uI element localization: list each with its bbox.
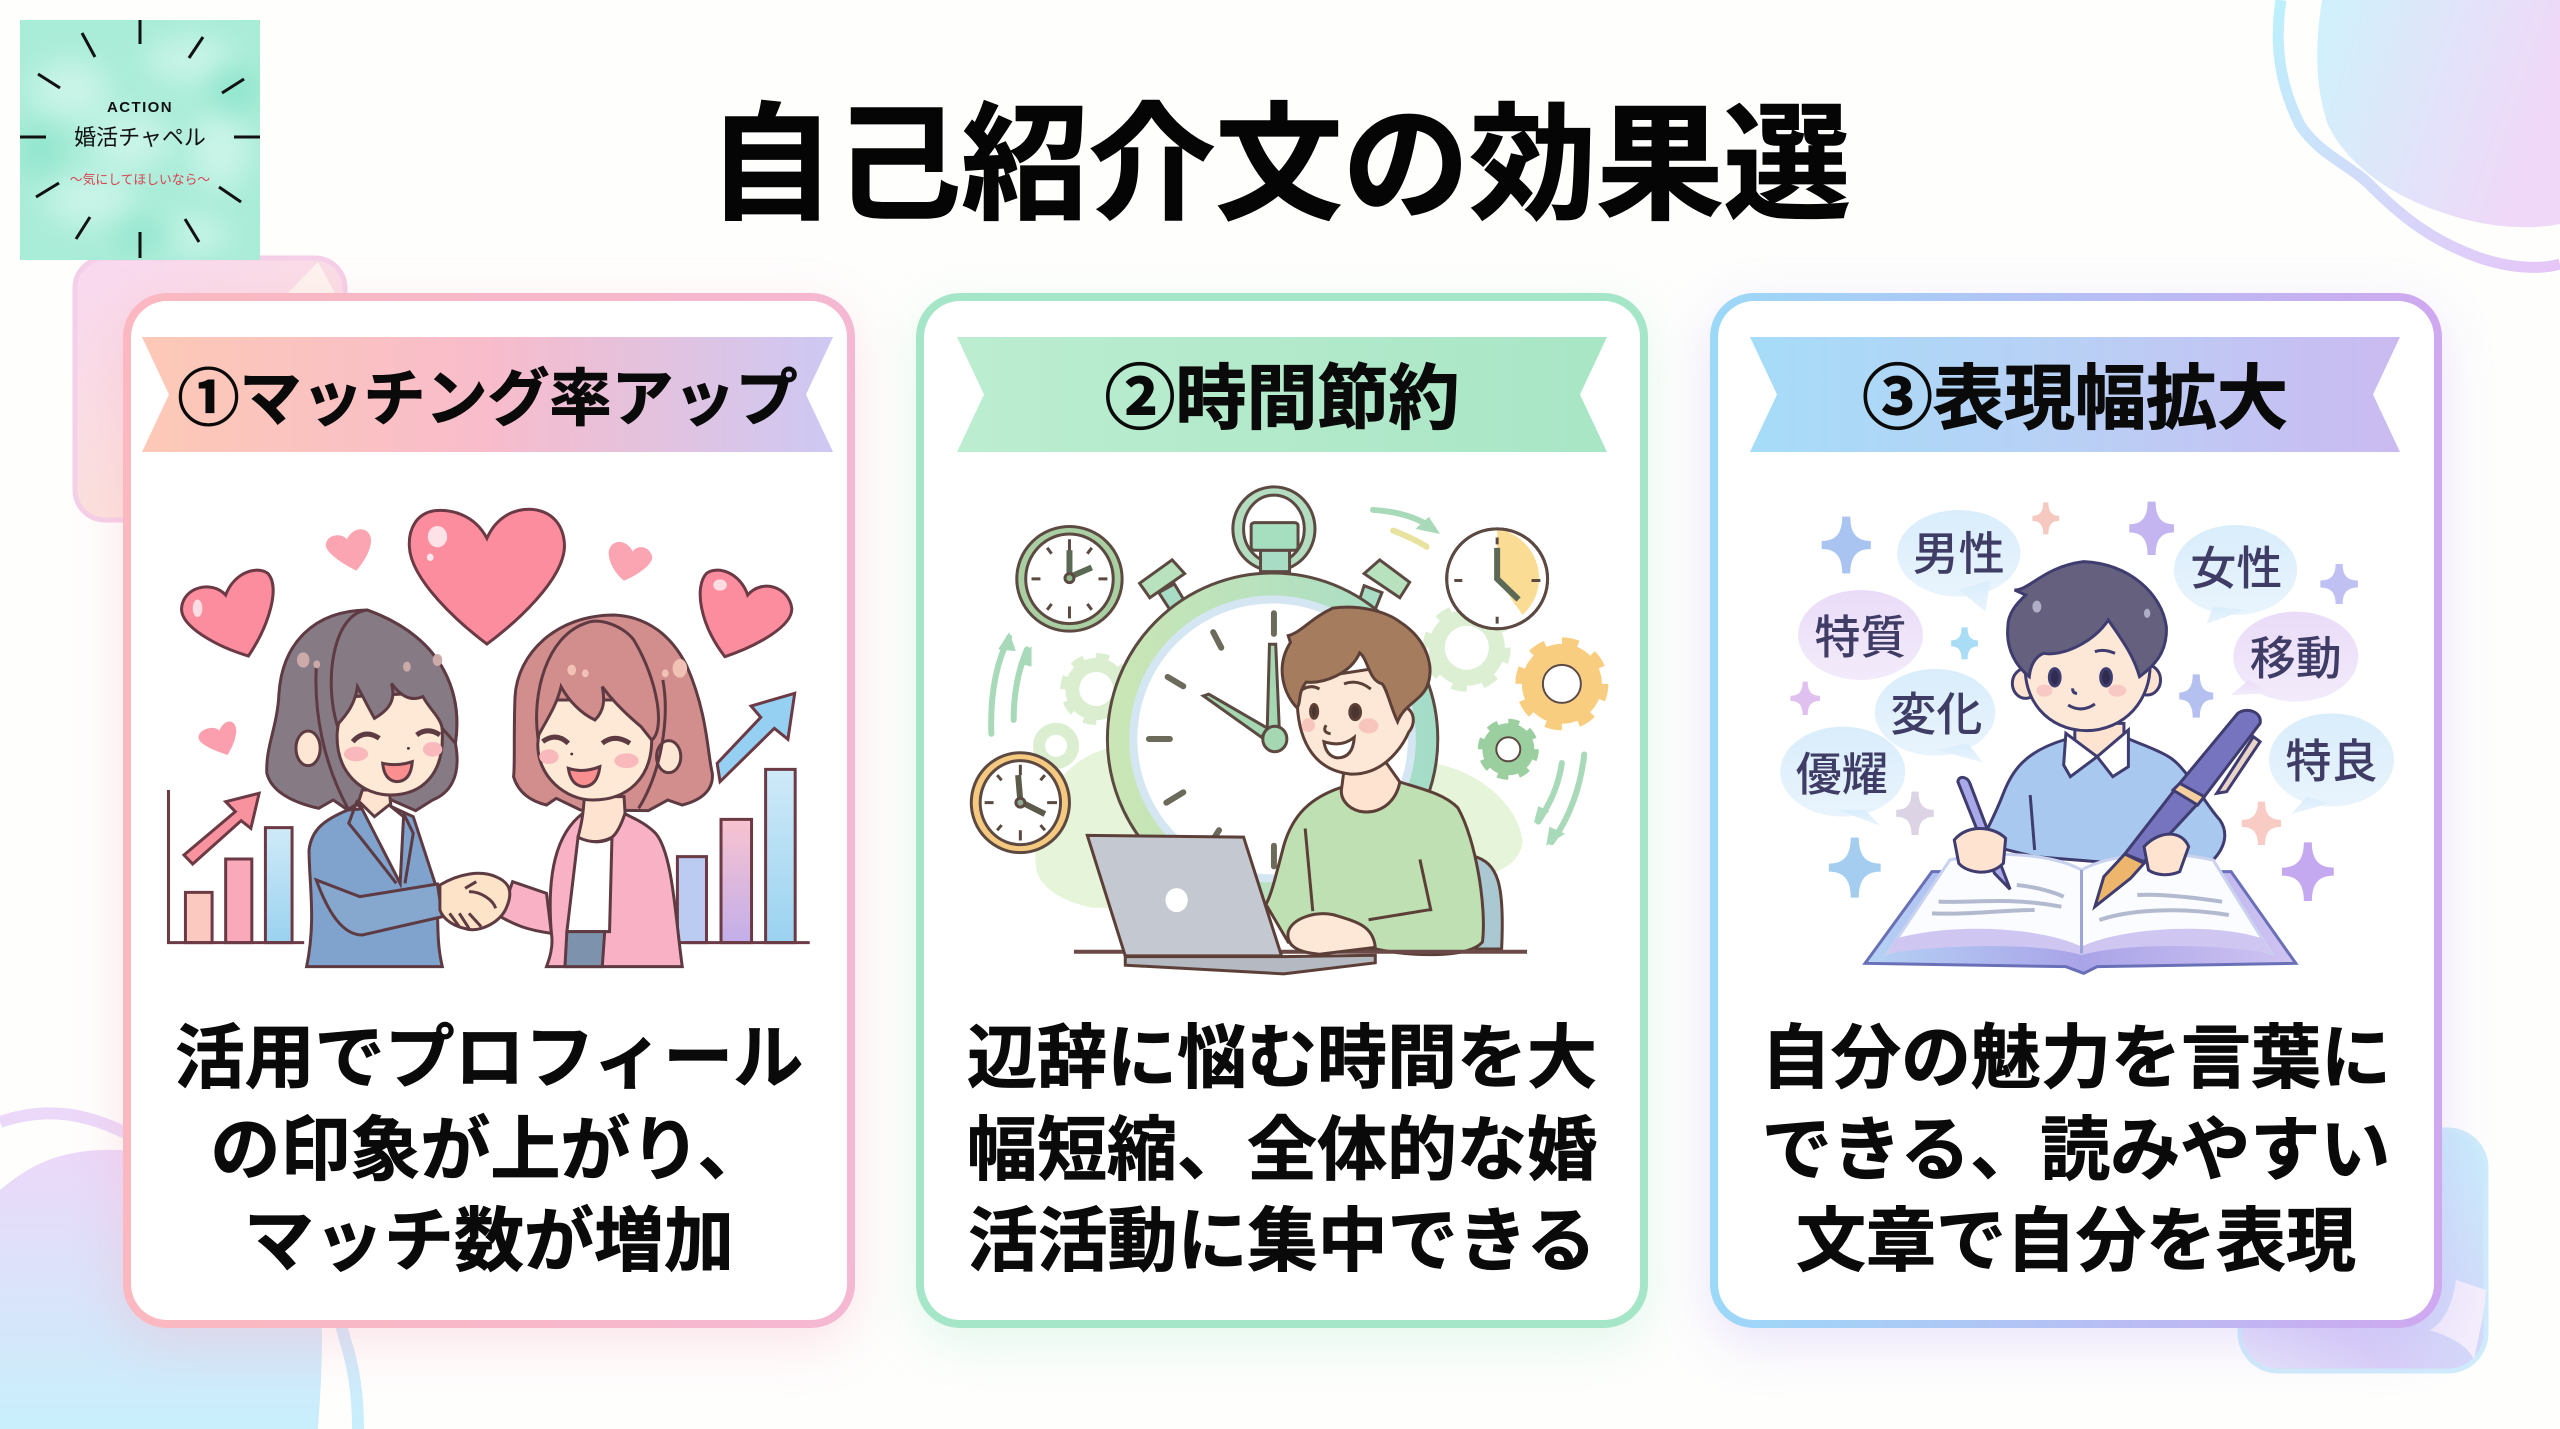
pencil and left hand bbox=[1954, 777, 2010, 889]
bubble words bbox=[1796, 528, 2378, 801]
fountain pen and right hand bbox=[2095, 710, 2260, 907]
body text bbox=[175, 1019, 803, 1280]
card frame bbox=[123, 293, 855, 1328]
illustration: man writing in book with word bubbles bbox=[1780, 502, 2394, 975]
left chart bbox=[168, 790, 304, 943]
pale gears bbox=[1066, 659, 1126, 719]
laptop bbox=[1087, 835, 1375, 974]
pale background blob bbox=[1035, 746, 1523, 908]
body text: 幅短縮、全体的な婚 bbox=[967, 1110, 1597, 1188]
bubble words: 男性 bbox=[1913, 528, 2005, 580]
ribbon heading: ②時間節約 bbox=[1104, 360, 1460, 439]
logo: ACTION 婚活チャペル: ACTION bbox=[107, 99, 173, 116]
woman in blue jacket bbox=[267, 610, 457, 967]
body text: マッチ数が増加 bbox=[244, 1202, 734, 1280]
table line bbox=[1074, 950, 1527, 954]
right chart bbox=[677, 693, 810, 943]
panel: 表現幅拡大 bbox=[1698, 293, 2454, 1356]
stopwatch bbox=[1107, 487, 1438, 905]
bubble words: 女性 bbox=[2190, 543, 2282, 595]
body text: の印象が上がり、 bbox=[210, 1110, 768, 1188]
logo: ACTION 婚活チャペル bbox=[20, 20, 260, 260]
ribbon heading bbox=[1750, 337, 2400, 452]
body text bbox=[1761, 1019, 2391, 1280]
body text: 活活動に集中できる bbox=[968, 1202, 1596, 1280]
body text: 活用でプロフィール bbox=[175, 1019, 803, 1097]
motion arrows bbox=[991, 510, 1584, 842]
bubble words: 移動 bbox=[2250, 633, 2342, 685]
ribbon heading bbox=[957, 337, 1607, 452]
ribbon heading: ③表現幅拡大 bbox=[1862, 360, 2288, 439]
body text: できる、読みやすい bbox=[1762, 1110, 2390, 1188]
logo: ACTION 婚活チャペル: ～気にしてほしいなら～ bbox=[70, 172, 210, 187]
card frame bbox=[1710, 293, 2442, 1328]
bubble words: 特良 bbox=[2286, 735, 2378, 787]
panel: 時間節約 bbox=[904, 293, 1660, 1356]
bubble words: 優耀 bbox=[1796, 749, 1888, 801]
man writing bbox=[1981, 562, 2225, 870]
body text: 辺辞に悩む時間を大 bbox=[967, 1019, 1597, 1097]
man bbox=[1266, 607, 1502, 955]
ribbon heading: ①マッチング率アップ bbox=[177, 365, 798, 434]
ribbon heading bbox=[142, 337, 833, 452]
body text bbox=[967, 1019, 1597, 1280]
gears bbox=[1523, 645, 1601, 723]
panel: マッチング率アップ bbox=[110, 293, 868, 1356]
bubble words: 特質 bbox=[1815, 611, 1907, 663]
open book bbox=[1865, 854, 2296, 973]
title: 自己紹介文の効果選 bbox=[707, 94, 1850, 236]
bubble words: 変化 bbox=[1890, 689, 1982, 741]
woman in pink cardigan bbox=[500, 615, 712, 967]
card frame bbox=[916, 293, 1648, 1328]
hearts bbox=[182, 509, 792, 755]
word bubbles bbox=[1780, 510, 2394, 826]
clocks bbox=[971, 526, 1548, 853]
illustration: handshake with hearts and rising charts bbox=[166, 508, 810, 968]
body text: 自分の魅力を言葉に bbox=[1761, 1019, 2391, 1097]
sparkles bbox=[1790, 502, 2358, 901]
illustration: man with stopwatch, clocks, gears and laptop bbox=[970, 485, 1608, 976]
logo: ACTION 婚活チャペル: 婚活チャペル bbox=[74, 125, 206, 150]
handshake bbox=[440, 873, 510, 930]
body text: 文章で自分を表現 bbox=[1796, 1202, 2356, 1280]
